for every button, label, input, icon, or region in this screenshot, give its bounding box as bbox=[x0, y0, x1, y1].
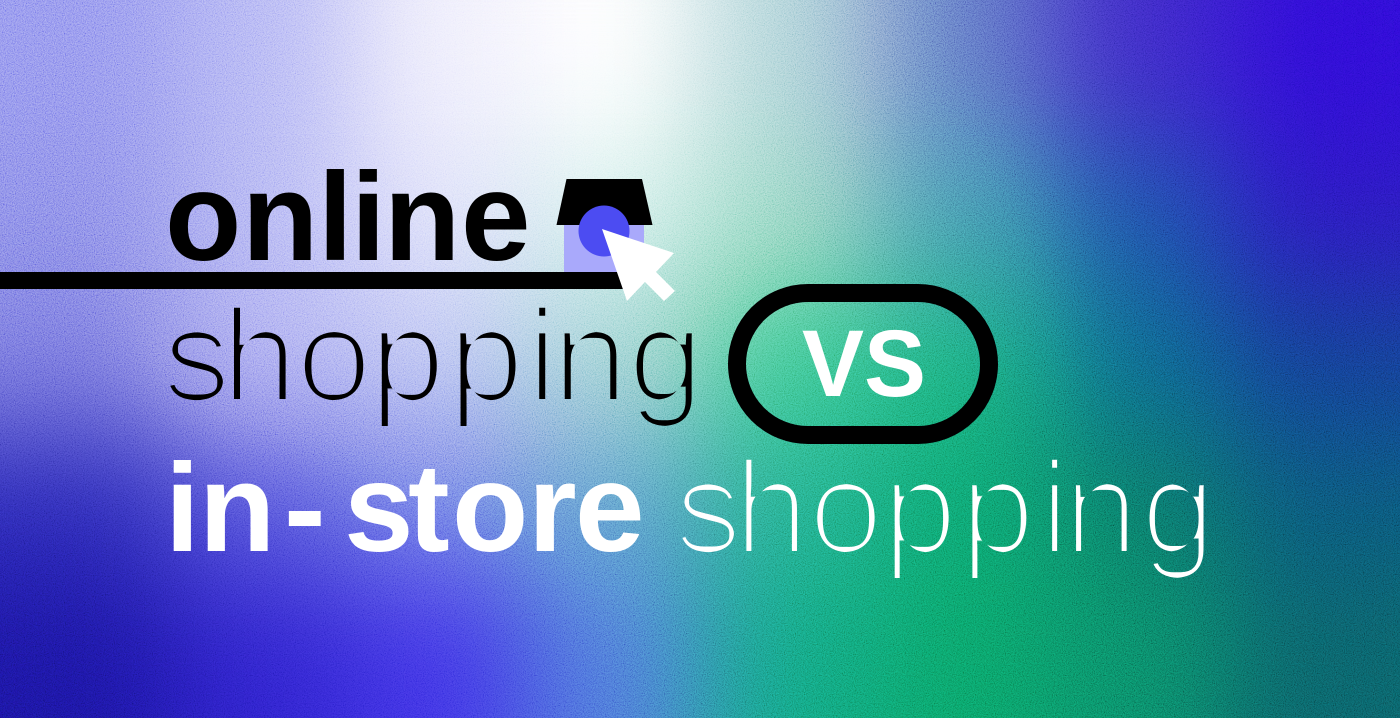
shop body bbox=[564, 225, 644, 272]
icon: shop bbox=[556, 179, 652, 272]
pill outline bbox=[737, 293, 989, 435]
underline bar bbox=[0, 272, 625, 289]
shop window circle bbox=[578, 206, 630, 256]
shop roof bbox=[556, 179, 652, 225]
icon: cursor arrow bbox=[602, 229, 675, 301]
vs badge bbox=[737, 293, 989, 435]
vs label: VS bbox=[802, 311, 926, 417]
heading: in-store: in-store bbox=[165, 439, 645, 578]
heading: online: online bbox=[165, 148, 531, 287]
heading: shopping (white): shopping bbox=[674, 435, 1216, 581]
heading: shopping (black): shopping bbox=[163, 283, 704, 429]
